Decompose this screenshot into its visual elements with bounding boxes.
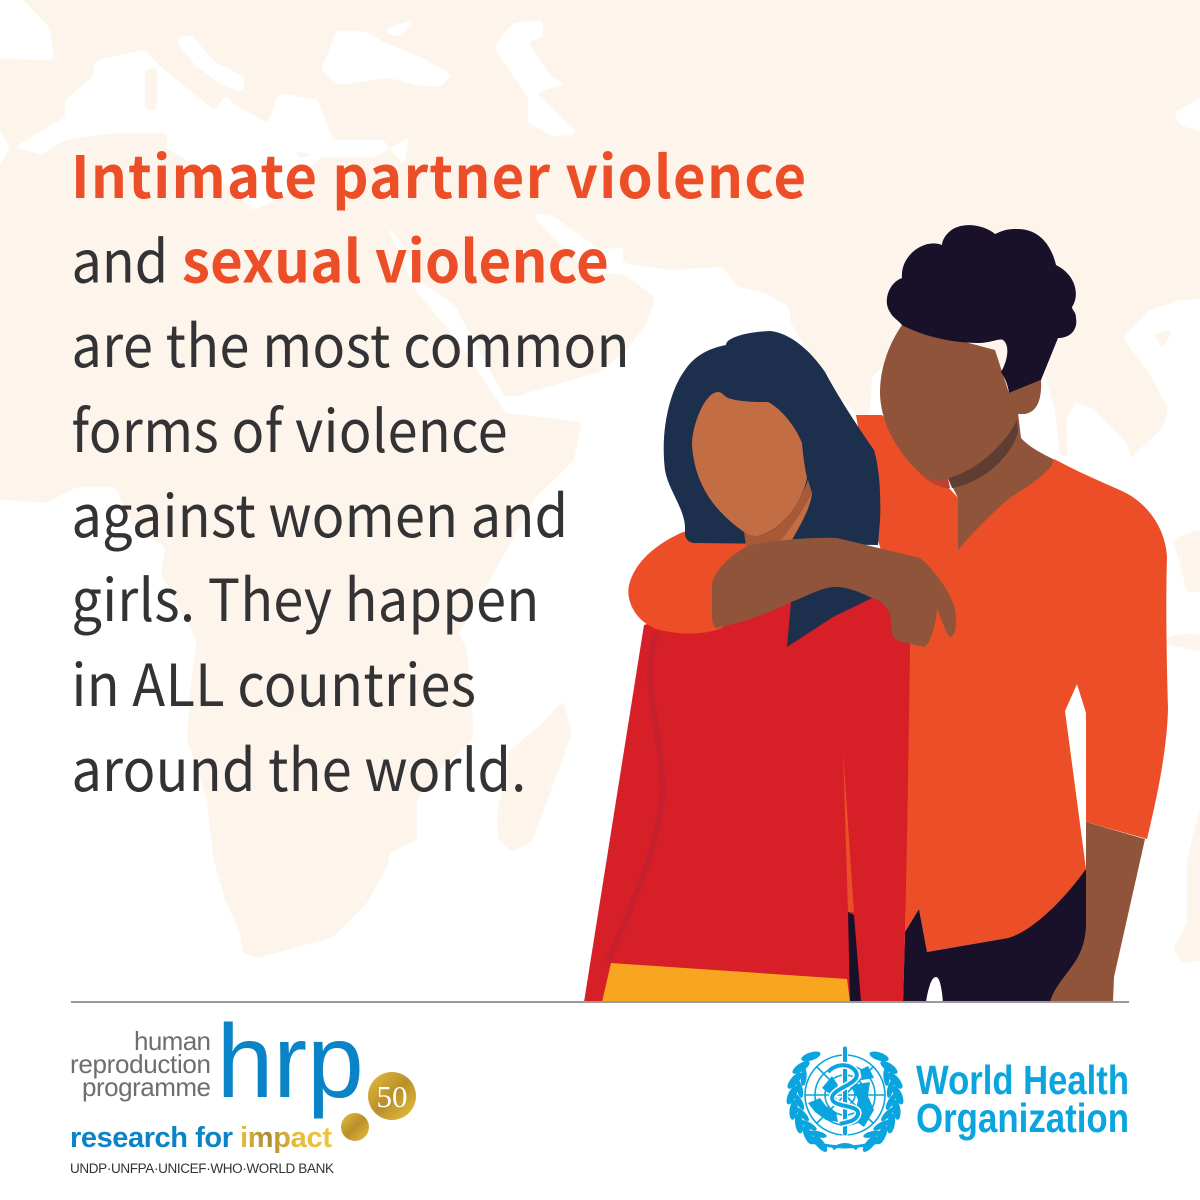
co-sponsors: UNDP·UNFPA·UNICEF·WHO·WORLD BANK [70,1161,334,1176]
man: dark trousers [903,869,1086,1002]
label: 50: 50 [376,1079,408,1114]
wordmark: Organization: Organization [916,1095,1129,1141]
man: chin shadow on shirt [920,473,950,488]
line 1: intimate partner violence: Intimate partner violence [71,132,806,215]
programme name: reproduction [70,1049,211,1079]
globe continents [808,1066,874,1127]
man: arm and hand [712,538,956,647]
right laurel [860,1050,906,1154]
line 7: in ALL countries [72,640,476,724]
line 2: and: and [72,216,168,300]
WHO emblem [784,1046,906,1154]
woman: dark slit in top [848,912,861,1002]
woman: yellow skirt [602,963,850,1002]
man: sleeve around woman [628,532,760,634]
serpent [828,1065,858,1124]
line 5: against women and [72,471,568,555]
hrp wordmark: hrp [217,1004,364,1120]
HRP logo [70,1004,416,1176]
woman: hair lock on chest [787,587,872,647]
woman: hair [664,331,880,545]
man: neck shadow [948,420,1018,488]
man: face and ear [880,325,1041,480]
programme name: programme [82,1072,211,1102]
wordmark: World Health: World Health [916,1057,1129,1103]
man: curly hair [887,225,1076,393]
line 6: girls. They happen [72,555,539,639]
WHO logo [784,1046,1129,1154]
staff [842,1046,848,1136]
gold circle: 50 years [368,1072,416,1120]
man: forearm [1050,822,1145,1002]
line 2: sexual violence: sexual violence [182,217,609,300]
woman: top seam [608,632,662,962]
globe rings [805,1055,885,1135]
woman: orange slit in top [843,750,854,912]
laurel ribbon [808,1141,882,1149]
tagline: research for: research for [70,1122,233,1154]
line 4: forms of violence [72,386,508,470]
tagline: impact: impact [240,1122,332,1154]
line 8: around the world. [72,725,526,809]
headline text [71,132,806,809]
woman: face [692,392,807,536]
woman: neck highlight [778,493,812,543]
programme name: human [134,1026,211,1056]
man: neck [948,413,1053,550]
small gold circle [341,1113,369,1141]
illustration: couple embracing [584,225,1168,1002]
divider line [71,1001,1129,1003]
woman: neck shadow [744,480,812,546]
man: orange shirt [856,415,1168,952]
programme name [70,1026,211,1102]
line 3: are the most common [72,301,630,385]
left laurel [784,1050,830,1154]
woman: red top [584,580,910,1002]
